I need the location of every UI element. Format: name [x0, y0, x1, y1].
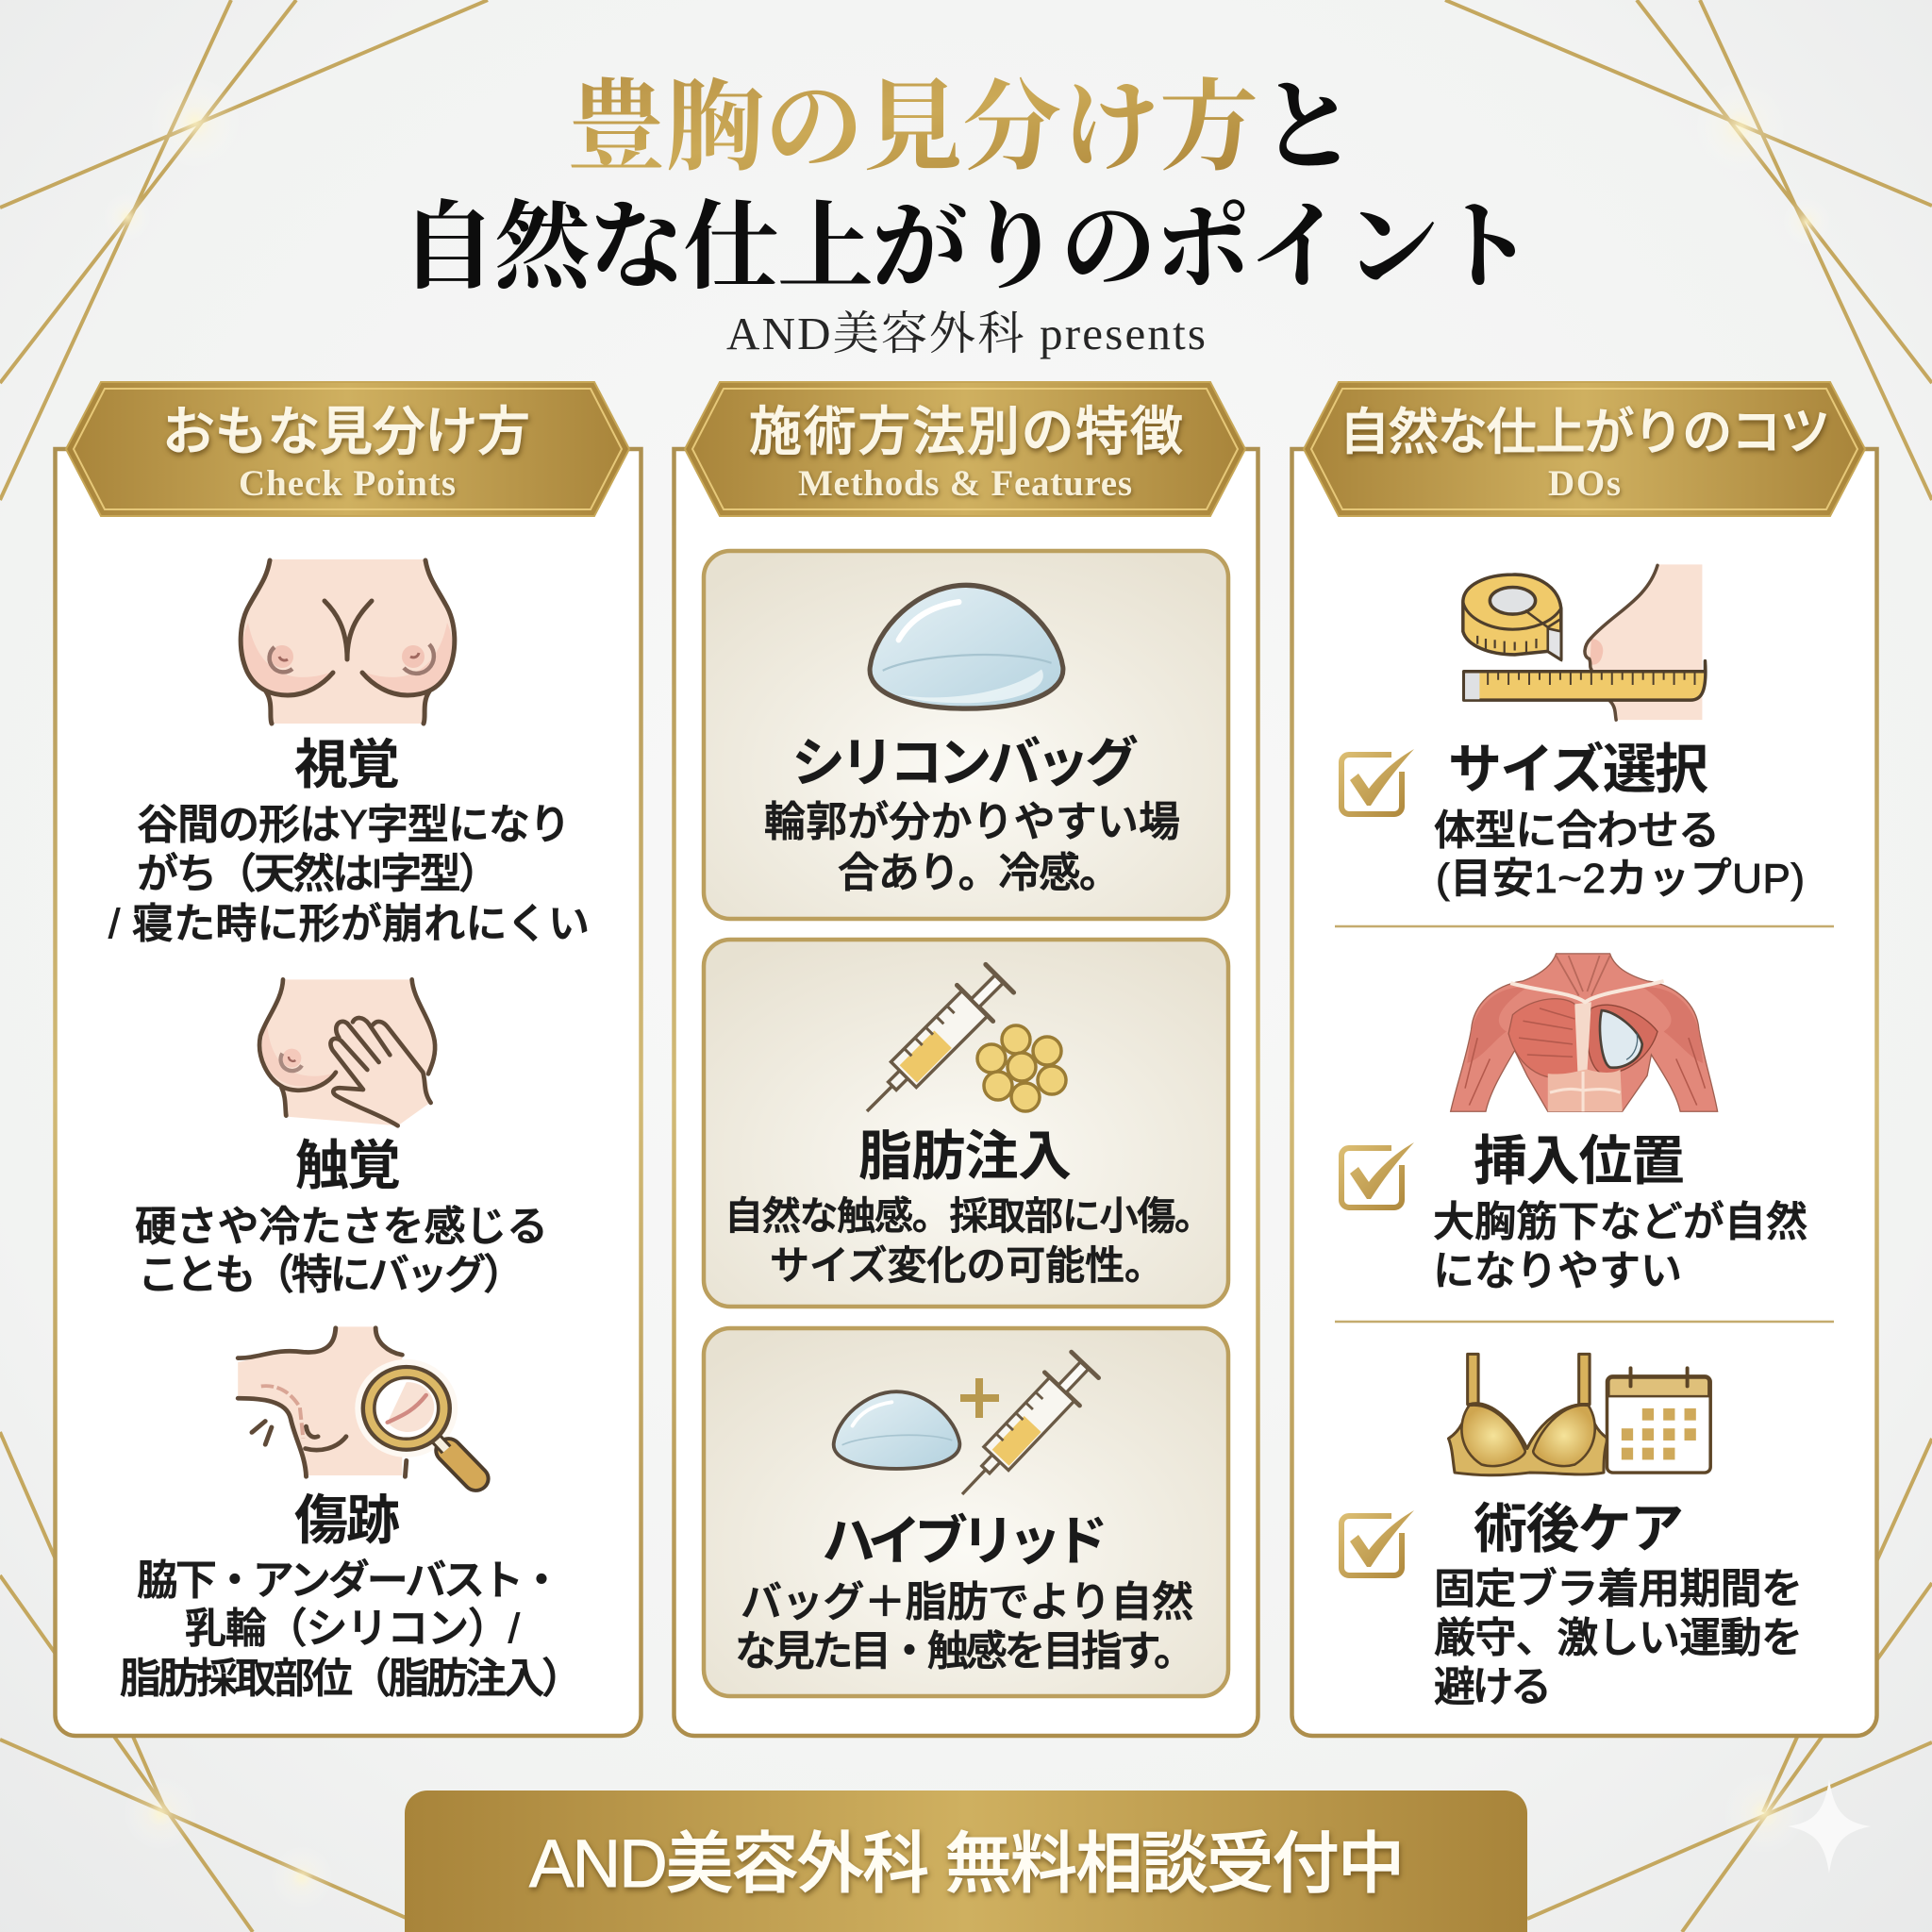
size heading: サイズ選択 — [1448, 740, 1708, 800]
heading ribbon: Check Points — [239, 463, 456, 504]
scar text: 脇下・アンダーバスト・ — [137, 1557, 562, 1604]
icon: calendar — [1607, 1368, 1710, 1473]
icon: syringe — [849, 960, 1018, 1129]
card: silicone — [704, 551, 1228, 919]
panel frame — [55, 449, 641, 1736]
divider — [1335, 925, 1834, 927]
card: fat injection: 脂肪注入 — [858, 1126, 1072, 1187]
card: fat injection — [704, 940, 1228, 1307]
footer banner — [405, 1790, 1527, 1932]
scar text: 乳輪（シリコン）/ — [185, 1606, 521, 1652]
panel: methods — [674, 382, 1258, 1736]
visual text — [108, 802, 590, 947]
icon: plus — [960, 1378, 999, 1418]
card: hybrid: ハイブリッド — [822, 1511, 1108, 1572]
visual text: 谷間の形はY字型になり — [137, 802, 571, 848]
touch text: 硬さや冷たさを感じる — [135, 1204, 548, 1250]
size text: 体型に合わせる — [1434, 808, 1720, 854]
icon: check 3 — [1341, 1510, 1414, 1575]
icon: hybrid syringe — [944, 1348, 1103, 1511]
panel frame — [674, 449, 1258, 1736]
subtitle: AND美容外科 presents — [726, 308, 1206, 359]
icon: measuring tape — [1463, 564, 1706, 720]
card: fat injection: 自然な触感。採取部に小傷。 — [724, 1194, 1213, 1238]
heading ribbon: 自然な仕上がりのコツ — [1340, 392, 1830, 464]
position text: 大胸筋下などが自然 — [1433, 1199, 1807, 1245]
card: silicone: シリコンバッグ — [791, 733, 1139, 793]
scar heading: 傷跡 — [294, 1491, 400, 1551]
scar text — [120, 1557, 583, 1702]
heading ribbon — [685, 382, 1245, 516]
icon: check 2 — [1341, 1142, 1414, 1208]
touch text: ことも（特にバッグ） — [138, 1252, 525, 1298]
card: hybrid: バッグ＋脂肪でより自然 — [741, 1579, 1193, 1625]
footer text: AND美容外科 無料相談受付中 — [529, 1827, 1405, 1902]
divider — [1335, 1321, 1834, 1323]
heading ribbon: DOs — [1548, 463, 1621, 504]
icon: scar and magnifier — [238, 1326, 475, 1478]
position text — [1433, 1199, 1807, 1294]
card: hybrid: な見た目・触感を目指す。 — [735, 1628, 1195, 1674]
position heading: 挿入位置 — [1474, 1131, 1685, 1191]
icon: breasts front view — [241, 559, 456, 724]
position text: になりやすい — [1433, 1248, 1682, 1294]
scar text: 脂肪採取部位（脂肪注入） — [120, 1656, 583, 1702]
size text: (目安1~2カップUP) — [1436, 856, 1805, 902]
icon: touching breast — [258, 979, 436, 1125]
aftercare text — [1434, 1566, 1803, 1710]
panel: tips — [1292, 382, 1877, 1736]
title line 2: 自然な仕上がりのポイント — [400, 171, 1534, 308]
icon: silicone implant — [870, 585, 1063, 708]
icon: fat cells — [977, 1025, 1066, 1111]
icon: small implant — [834, 1391, 959, 1469]
heading ribbon — [1304, 382, 1865, 516]
card: hybrid — [704, 1328, 1228, 1696]
sparkle — [1788, 1779, 1871, 1874]
title line 1: 豊胸の見分け方と — [567, 48, 1357, 191]
size text — [1434, 808, 1805, 902]
title — [400, 48, 1534, 308]
panel: check points — [55, 382, 641, 1736]
card: silicone: 輪郭が分かりやすい場 — [764, 799, 1180, 845]
aftercare heading: 術後ケア — [1474, 1499, 1684, 1559]
aftercare text: 厳守、激しい運動を — [1434, 1615, 1803, 1661]
icon: bra — [1448, 1354, 1607, 1475]
heading ribbon: Methods & Features — [798, 463, 1132, 504]
visual text: / 寝た時に形が崩れにくい — [108, 901, 590, 947]
heading ribbon: 施術方法別の特徴 — [749, 390, 1183, 466]
aftercare text: 避ける — [1434, 1664, 1552, 1710]
card: fat injection: サイズ変化の可能性。 — [770, 1243, 1164, 1288]
touch heading: 触覚 — [295, 1136, 401, 1196]
visual text: がち（天然はI字型） — [137, 851, 500, 897]
touch text — [135, 1204, 548, 1298]
visual heading: 視覚 — [294, 735, 400, 795]
heading ribbon — [66, 382, 629, 516]
icon: check 1 — [1341, 749, 1414, 814]
icon: chest muscles with implant — [1451, 954, 1718, 1111]
panel frame — [1292, 449, 1877, 1736]
aftercare text: 固定ブラ着用期間を — [1434, 1566, 1803, 1612]
card: silicone: 合あり。冷感。 — [838, 850, 1121, 896]
heading ribbon: おもな見分け方 — [162, 390, 530, 466]
